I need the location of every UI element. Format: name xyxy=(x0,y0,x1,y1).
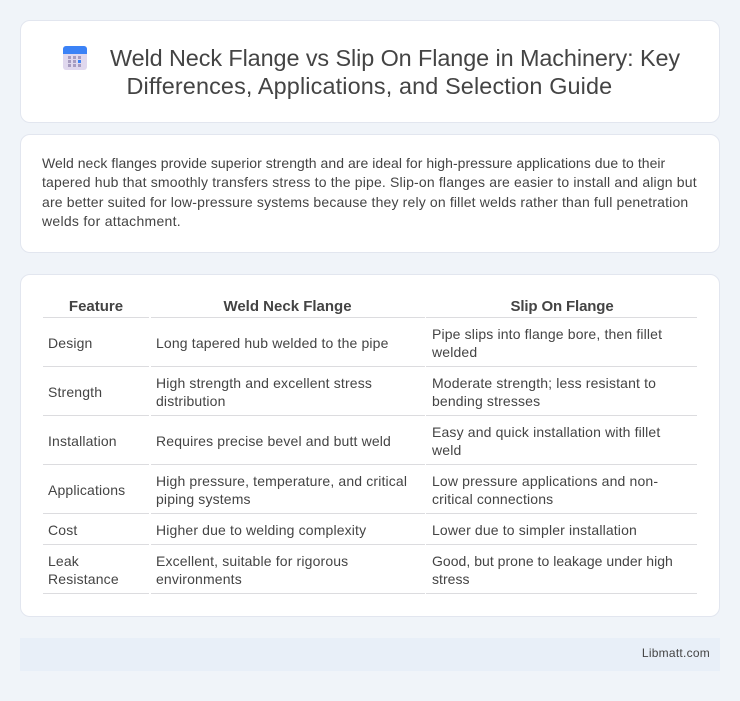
row: applications: piping systems xyxy=(156,491,251,507)
row: installation xyxy=(48,424,660,458)
header card xyxy=(20,20,720,123)
row: design: Long tapered hub welded to the pipe xyxy=(156,335,389,351)
row: strength: Moderate strength; less resistant to xyxy=(432,375,656,391)
row: strength: Strength xyxy=(48,384,102,400)
row: design: Pipe slips into flange bore, then fillet xyxy=(432,326,662,342)
summary text: welds for attachment. xyxy=(42,213,181,229)
row: design: welded xyxy=(432,344,477,360)
summary text: are better suited for low-pressure systems because they rely on fillet welds rather than full penetration xyxy=(42,194,688,210)
icon: calendar xyxy=(63,46,87,70)
row: installation: Installation xyxy=(48,433,117,449)
row: design xyxy=(48,326,662,360)
row: applications: Applications xyxy=(48,482,125,498)
row: design: Design xyxy=(48,335,92,351)
row: cost: Cost xyxy=(48,522,77,538)
row: strength: High strength and excellent stress xyxy=(156,375,372,391)
summary text: Weld neck flanges provide superior strength and are ideal for high-pressure applications due to their xyxy=(42,155,665,171)
row: leak resistance: Good, but prone to leakage under high xyxy=(432,553,673,569)
row: applications xyxy=(48,473,658,507)
table header row xyxy=(69,298,614,315)
footer text: Libmatt.com xyxy=(642,646,710,660)
row: installation: Easy and quick installation with fillet xyxy=(432,424,660,440)
title xyxy=(110,45,680,99)
row: leak resistance: Leak xyxy=(48,553,79,569)
row: applications: Low pressure applications and non- xyxy=(432,473,658,489)
row: leak resistance: environments xyxy=(156,571,242,587)
title: Weld Neck Flange vs Slip On Flange in Machinery: Key xyxy=(110,45,680,71)
row: strength xyxy=(48,375,656,409)
row: leak resistance: Resistance xyxy=(48,571,119,587)
row: cost: Higher due to welding complexity xyxy=(156,522,366,538)
table header row: Slip On Flange xyxy=(510,298,614,315)
summary card xyxy=(20,134,720,253)
footer xyxy=(20,638,720,671)
row: cost: Lower due to simpler installation xyxy=(432,522,637,538)
table header row: Feature xyxy=(69,298,123,315)
summary text: tapered hub that smoothly transfers stress to the pipe. Slip-on flanges are easier to install and align but xyxy=(42,174,697,190)
row: strength: bending stresses xyxy=(432,393,540,409)
row: applications: critical connections xyxy=(432,491,553,507)
row: installation: Requires precise bevel and butt weld xyxy=(156,433,391,449)
table header row: Weld Neck Flange xyxy=(223,298,352,315)
row: strength: distribution xyxy=(156,393,226,409)
row: leak resistance: stress xyxy=(432,571,470,587)
row: cost xyxy=(48,522,637,538)
row: leak resistance: Excellent, suitable for rigorous xyxy=(156,553,348,569)
title: Differences, Applications, and Selection Guide xyxy=(126,73,612,99)
row: applications: High pressure, temperature, and critical xyxy=(156,473,407,489)
row: installation: weld xyxy=(432,442,461,458)
row: leak resistance xyxy=(48,553,673,587)
summary text xyxy=(42,155,697,229)
table card xyxy=(20,274,720,617)
